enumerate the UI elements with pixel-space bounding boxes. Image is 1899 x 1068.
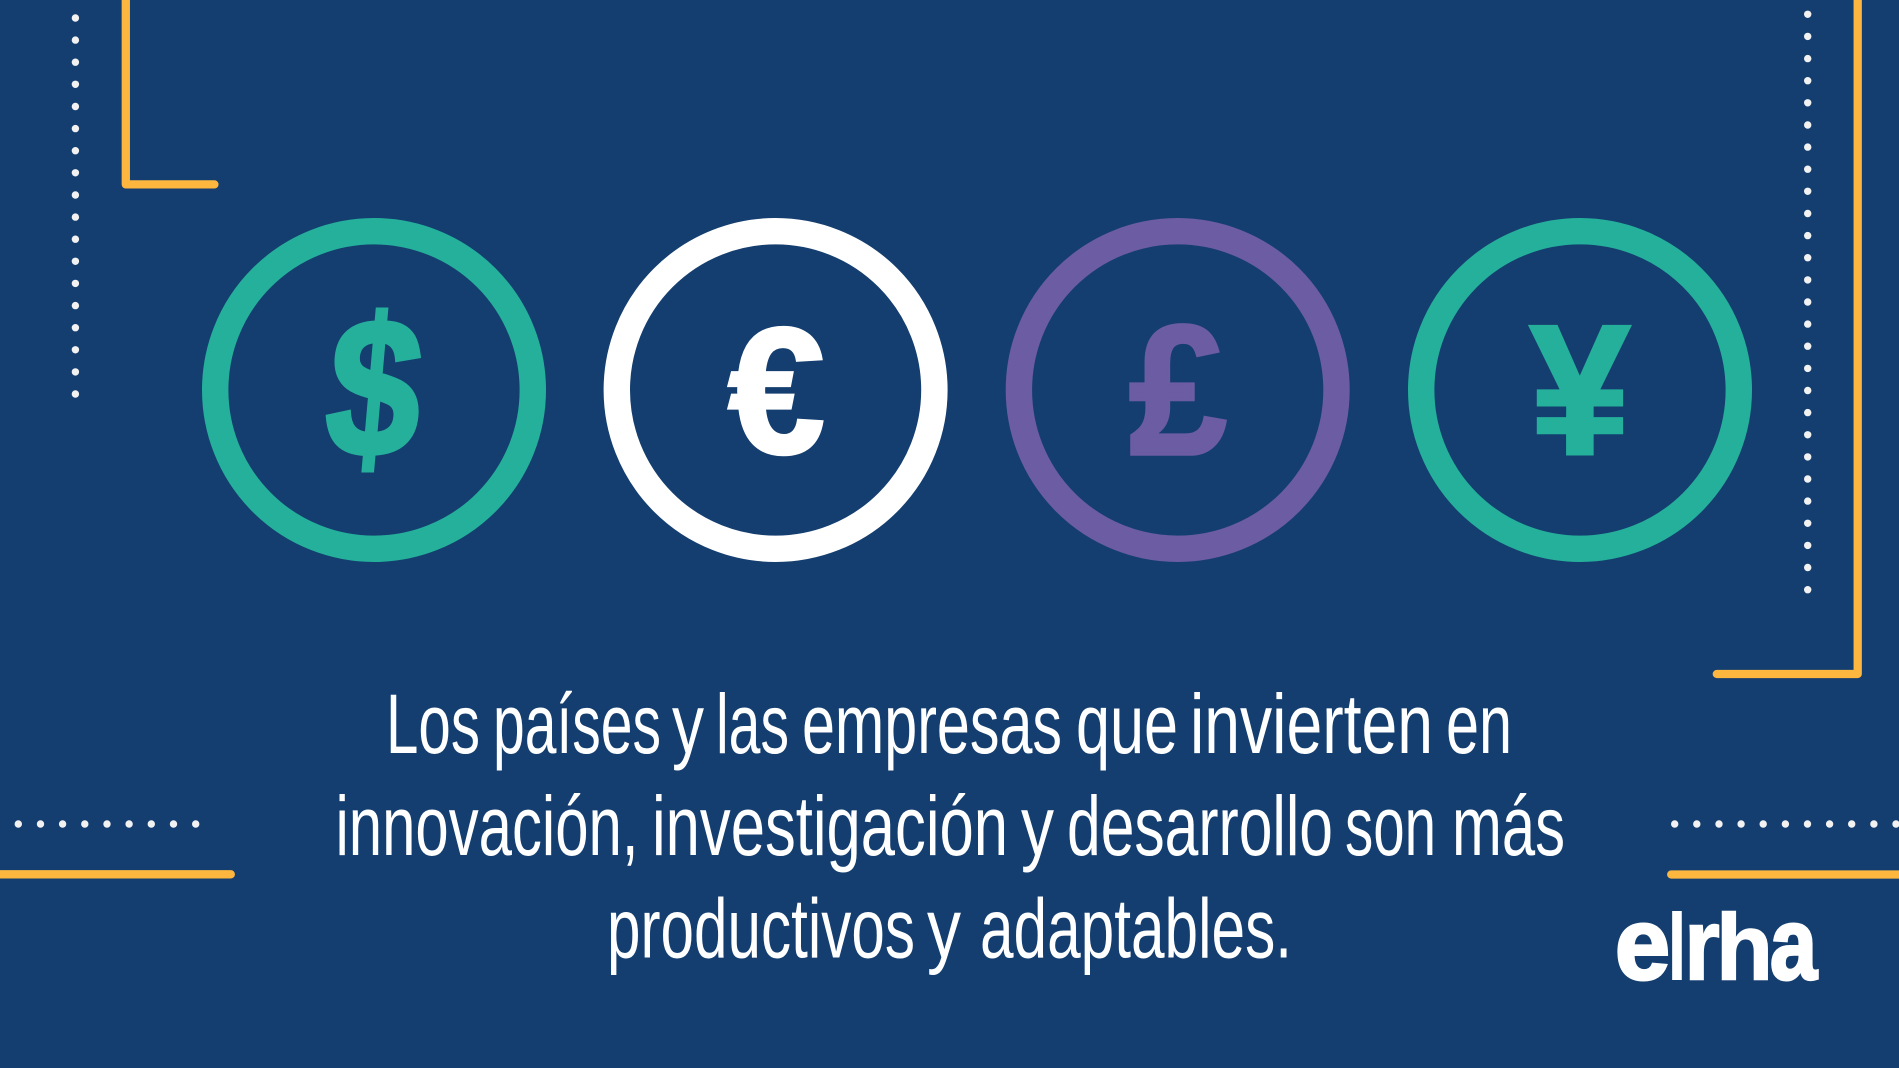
yellow corner bracket: top left bbox=[126, 0, 214, 184]
logo: elrha bbox=[1615, 887, 1818, 1002]
logo: elrha: h bbox=[1716, 894, 1773, 1000]
icon: yen coin bbox=[1421, 231, 1739, 549]
icon: dollar coin: $ bbox=[318, 278, 431, 498]
main statement text: en bbox=[1446, 677, 1512, 771]
main statement text: productivos bbox=[607, 882, 915, 976]
main statement text: investigación bbox=[652, 779, 1008, 873]
icon: pound coin: £ bbox=[1129, 288, 1227, 494]
main statement text bbox=[336, 677, 1565, 976]
main statement text: y bbox=[1021, 779, 1054, 873]
icon: euro coin: € bbox=[728, 290, 825, 492]
logo: elrha: r bbox=[1684, 888, 1720, 1002]
logo: elrha: a bbox=[1770, 887, 1818, 1001]
icon: yen coin: ¥ bbox=[1530, 288, 1630, 493]
main statement text: países bbox=[493, 677, 661, 771]
main statement text: empresas bbox=[802, 677, 1062, 771]
main statement text: son bbox=[1345, 779, 1436, 873]
main statement text: innovación, bbox=[336, 779, 638, 873]
logo: elrha: l bbox=[1668, 894, 1686, 1000]
main statement text: y bbox=[927, 882, 961, 976]
icon: euro coin bbox=[617, 231, 934, 549]
yellow line: bottom left bbox=[0, 870, 231, 878]
main statement text: más bbox=[1452, 779, 1565, 873]
main statement text: y bbox=[672, 677, 704, 771]
dotted line: top left vertical bbox=[72, 14, 79, 398]
dotted line: top right vertical bbox=[1804, 11, 1811, 593]
main statement text: invierten bbox=[1190, 677, 1433, 771]
icon: pound coin bbox=[1019, 231, 1336, 549]
yellow corner bracket: top right bbox=[1717, 0, 1858, 674]
dotted line: bottom right horizontal bbox=[1671, 820, 1899, 828]
main statement text: desarrollo bbox=[1067, 779, 1333, 873]
main statement text: las bbox=[716, 677, 789, 771]
main statement text: Los bbox=[386, 677, 480, 771]
main statement text: que bbox=[1076, 677, 1178, 771]
yellow line: bottom right bbox=[1671, 870, 1899, 879]
main statement text: adaptables. bbox=[980, 882, 1292, 976]
dotted line: bottom left horizontal bbox=[0, 820, 199, 828]
icon: dollar coin bbox=[215, 231, 533, 549]
logo: elrha: e bbox=[1615, 887, 1670, 1001]
